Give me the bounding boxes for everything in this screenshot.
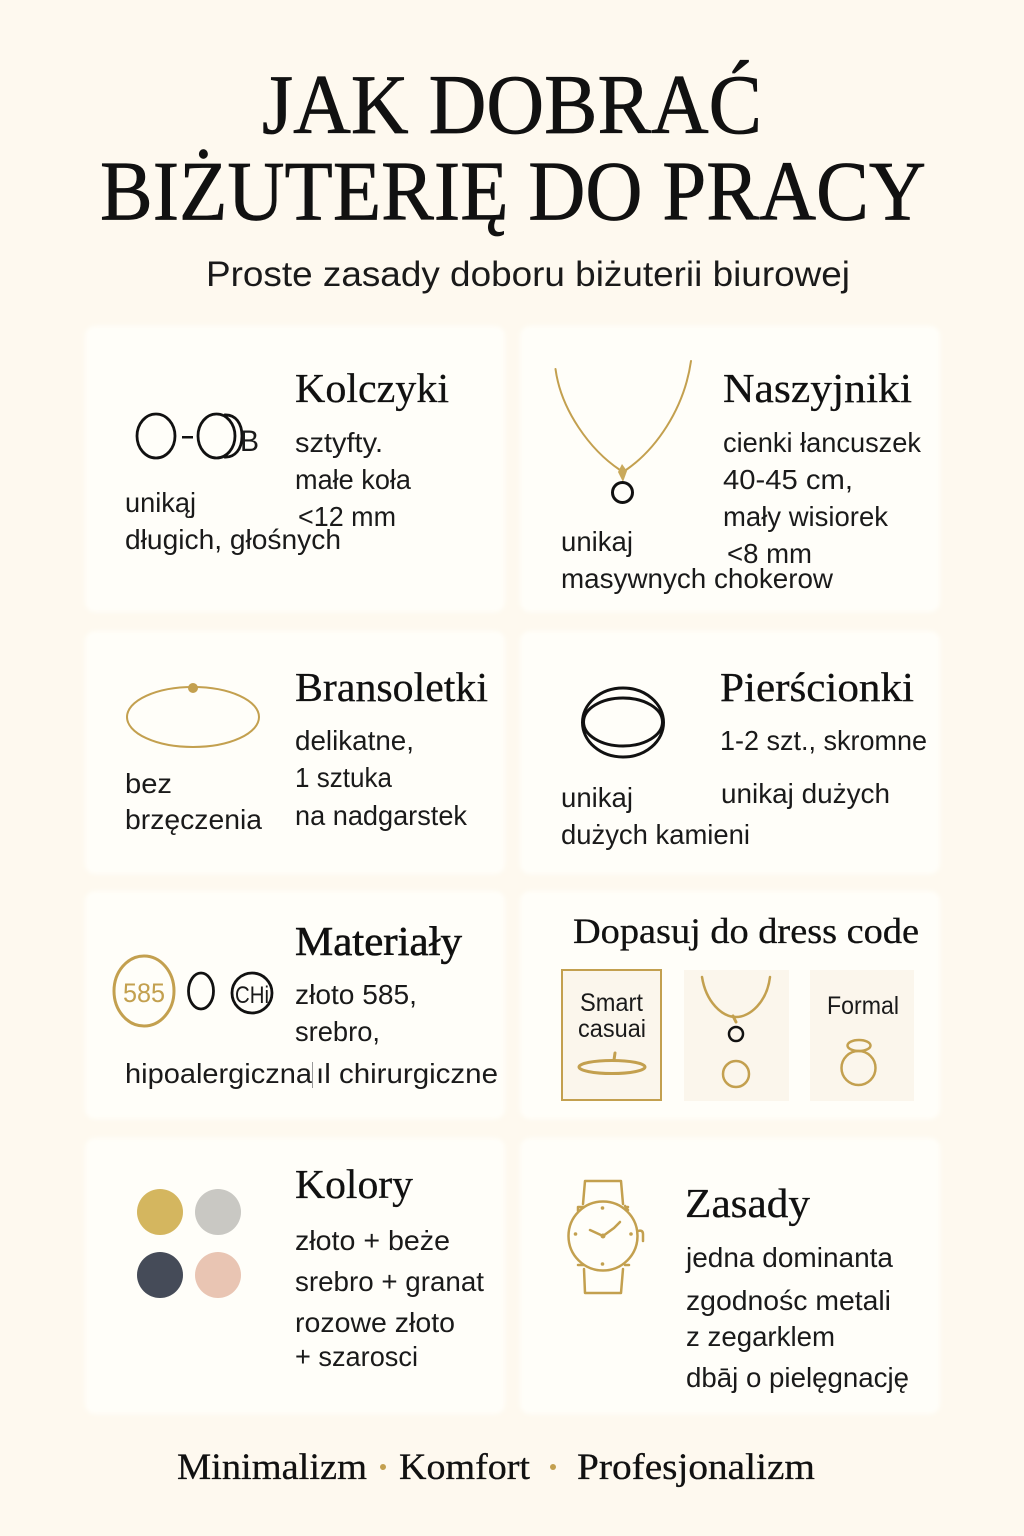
- necklaces warning: unikaj: [561, 526, 633, 557]
- panel: necklaces: [520, 326, 940, 612]
- icon: silver ring: [188, 973, 214, 1009]
- heading: colours: Kolory: [295, 1161, 414, 1207]
- rules list: [685, 1242, 909, 1393]
- subtitle: Proste zasady doboru biżuterii biurowej: [206, 255, 850, 294]
- rules list: dbāj o pielęgnację: [686, 1362, 909, 1393]
- icon: necklace: [556, 361, 691, 502]
- icon: bracelet: [127, 683, 259, 747]
- earrings advice: <12 mm: [298, 501, 396, 532]
- heading: rings: Pierścionki: [720, 664, 914, 710]
- rules list: z zegarklem: [686, 1321, 835, 1352]
- rings warning: [561, 782, 750, 850]
- colours list: + szarosci: [295, 1341, 418, 1372]
- panel: materials: [85, 891, 505, 1119]
- colours list: srebro + granat: [295, 1266, 484, 1297]
- panel: rings: [520, 631, 940, 874]
- option: formal: [810, 970, 914, 1101]
- heading: bracelets: Bransoletki: [295, 664, 488, 710]
- necklaces advice: cienki łancuszek: [723, 427, 922, 458]
- rules list: jedna dominanta: [685, 1242, 893, 1273]
- heading: earrings: Kolczyki: [295, 365, 449, 411]
- materials list: [125, 979, 498, 1089]
- rules list: zgodnośc metali: [686, 1285, 891, 1316]
- bracelets advice: [295, 725, 468, 831]
- option: business: [684, 970, 789, 1101]
- necklaces advice: mały wisiorek: [723, 501, 889, 532]
- title: JAK DOBRAĆ: [262, 58, 762, 152]
- bracelets note: brzęczenia: [125, 804, 262, 835]
- bracelets note: [125, 768, 262, 835]
- title: BIŻUTERIĘ DO PRACY: [100, 144, 926, 238]
- icon: surgical steel hallmark: [232, 973, 272, 1013]
- heading: materials: Materiały: [295, 918, 463, 964]
- panel: bracelets: [85, 631, 505, 874]
- footer tagline: Minimalizm: [177, 1447, 367, 1488]
- panel: earrings: [85, 326, 505, 612]
- option: smart casual: Smart: [580, 989, 643, 1017]
- footer tagline: Komfort: [399, 1447, 531, 1488]
- option: smart casual: casuai: [578, 1015, 646, 1043]
- bracelets advice: 1 sztuka: [295, 762, 392, 793]
- heading: dress code: Dopasuj do dress code: [573, 911, 919, 951]
- icon: watch: [568, 1181, 643, 1293]
- materials list: ıl chirurgiczne: [316, 1058, 498, 1089]
- materials list: srebro,: [295, 1016, 380, 1047]
- title: [100, 58, 926, 238]
- footer tagline: Profesjonalizm: [577, 1447, 815, 1488]
- icon: 585 gold hallmark: [114, 956, 174, 1026]
- heading: necklaces: Naszyjniki: [723, 365, 912, 411]
- earrings warning: unikąj: [125, 487, 196, 518]
- earrings advice: [295, 427, 411, 532]
- colour swatches: [137, 1189, 241, 1298]
- rings warning: unikaj: [561, 782, 633, 813]
- bracelets note: bez: [125, 768, 172, 799]
- icon: surgical steel hallmark: CHi: [235, 982, 269, 1009]
- option: formal: Formal: [827, 992, 899, 1020]
- bracelets advice: na nadgarstek: [295, 800, 468, 831]
- option: smart casual: [562, 970, 661, 1100]
- materials list: hipoalergiczna: [125, 1058, 312, 1089]
- rings advice: [720, 725, 927, 809]
- rings warning: dużych kamieni: [561, 819, 750, 850]
- rings advice: unikaj dużych: [721, 778, 890, 809]
- icon: earrings: [137, 414, 259, 458]
- icon: ring: [582, 688, 664, 757]
- colours list: rozowe złoto: [295, 1307, 455, 1338]
- heading: rules: Zasady: [685, 1180, 811, 1226]
- colours list: złoto + beże: [295, 1225, 450, 1256]
- earrings warning: [125, 487, 341, 555]
- rings advice: 1-2 szt., skromne: [720, 725, 927, 756]
- necklaces warning: [561, 526, 834, 594]
- bracelets advice: delikatne,: [295, 725, 414, 756]
- panel: dress code: [520, 891, 940, 1119]
- necklaces advice: [723, 427, 922, 569]
- panel: rules: [520, 1138, 940, 1414]
- panel: colours: [85, 1138, 505, 1414]
- necklaces warning: masywnych chokerow: [561, 563, 834, 594]
- earrings advice: sztyfty.: [295, 427, 383, 458]
- necklaces advice: 40-45 cm,: [723, 464, 853, 495]
- necklaces advice: <8 mm: [727, 538, 812, 569]
- icon: earrings: B: [240, 425, 259, 458]
- earrings advice: małe koła: [295, 464, 411, 495]
- icon: 585 gold hallmark: 585: [123, 978, 165, 1008]
- earrings warning: długich, głośnych: [125, 524, 341, 555]
- colours list: [295, 1225, 484, 1372]
- materials list: złoto 585,: [295, 979, 417, 1010]
- footer tagline: [177, 1447, 815, 1488]
